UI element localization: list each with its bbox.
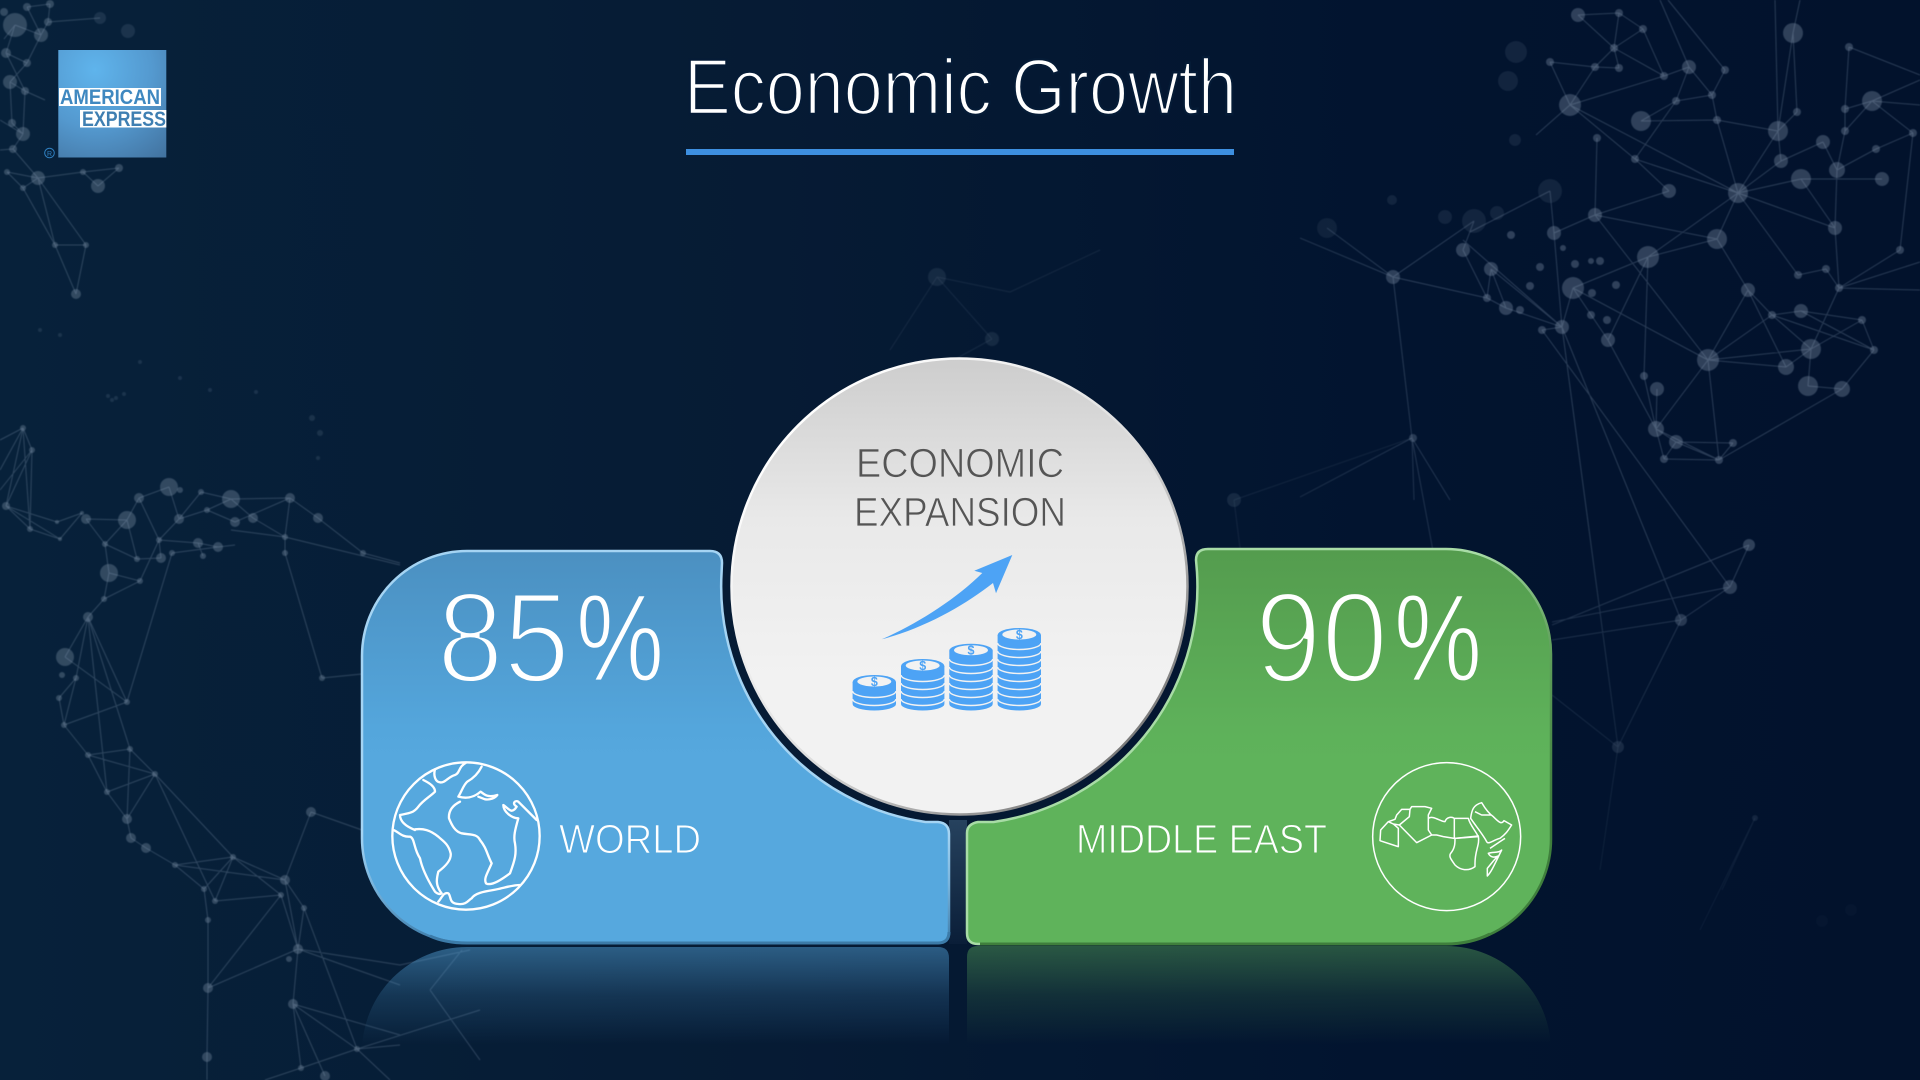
value: 85%: 85 — [437, 566, 570, 710]
coin stack 3 — [949, 644, 993, 710]
value: 90%: 90 — [1255, 566, 1388, 710]
network map background: center faint links — [890, 250, 1412, 548]
bottom edge shade — [980, 934, 1490, 944]
coin stack 4: $ — [1016, 628, 1023, 642]
panel gap shading — [949, 820, 967, 944]
value: 90%: % — [1394, 570, 1482, 708]
title underline — [686, 149, 1234, 155]
coin stack 4 — [998, 628, 1041, 710]
icon: coin stacks — [853, 628, 1041, 710]
value: 85% — [437, 566, 664, 710]
panel: world (blue) — [362, 551, 949, 943]
title: Economic Growth — [684, 42, 1237, 131]
network map background: left cluster — [0, 0, 480, 1080]
panel: central circle — [732, 358, 1188, 814]
coin stack 1: $ — [871, 675, 878, 689]
value: 85%: % — [576, 570, 664, 708]
label: middle east: MIDDLE EAST — [1076, 816, 1327, 862]
coin stack 2 — [901, 659, 944, 710]
panel: middle east (green) — [967, 549, 1551, 944]
logo: American Express: EXPRESS — [82, 108, 166, 131]
reflection: blue panel — [362, 947, 949, 1052]
label: world: WORLD — [559, 816, 701, 862]
logo: American Express: AMERICAN — [60, 86, 160, 109]
coin stack 3: $ — [968, 644, 975, 658]
reflection: green panel — [967, 946, 1551, 1051]
icon: growth arrow — [882, 555, 1012, 639]
coin stack 2: $ — [919, 659, 926, 673]
coin stack 1 — [853, 675, 896, 710]
bottom edge shade — [430, 932, 949, 943]
heading: economic expansion: ECONOMIC — [856, 440, 1064, 486]
logo: American Express: R — [47, 151, 52, 158]
value: 90% — [1255, 566, 1482, 710]
heading: economic expansion — [854, 440, 1066, 535]
logo: American Express — [45, 50, 166, 158]
network map background: right cluster — [1300, 0, 1920, 876]
icon: globe — [392, 762, 540, 910]
heading: economic expansion: EXPANSION — [854, 489, 1066, 535]
icon: middle east map — [1373, 763, 1521, 911]
